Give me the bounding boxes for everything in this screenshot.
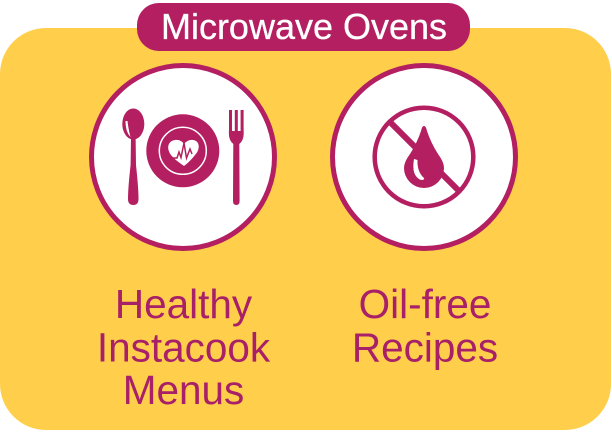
icon: spoon (122, 108, 144, 205)
label: Oil-free Recipes: Recipes (352, 324, 498, 370)
label: Healthy Instacook Menus (97, 281, 271, 413)
label: Healthy Instacook Menus: Menus (123, 367, 244, 413)
icon: oil drop (404, 126, 444, 188)
icon: plate with heart (146, 114, 219, 187)
icon: no oil symbol (332, 66, 516, 248)
title badge: Microwave Ovens (161, 6, 447, 47)
label: Healthy Instacook Menus: Healthy (115, 281, 253, 327)
label: Healthy Instacook Menus: Instacook (97, 324, 271, 370)
icon: fork (229, 110, 244, 205)
label: Oil-free Recipes (352, 281, 498, 370)
label: Oil-free Recipes: Oil-free (359, 281, 491, 327)
icon: healthy meal plate with cutlery (92, 66, 274, 248)
